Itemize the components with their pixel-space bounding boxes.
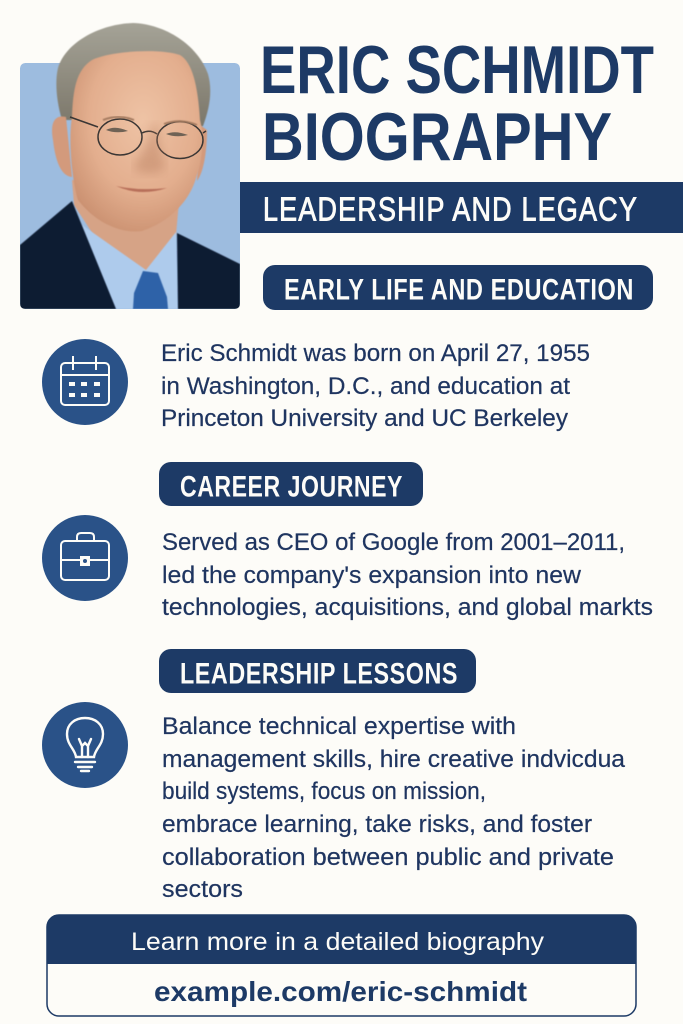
text block: early life: in Washington, D.C., and education at (161, 373, 570, 400)
text block: leadership lessons: embrace learning, take risks, and foster (162, 811, 592, 838)
text block: early life: Eric Schmidt was born on April 27, 1955 (161, 340, 590, 367)
portrait photo (20, 23, 240, 309)
title: BIOGRAPHY (262, 99, 612, 175)
eyes and brows (106, 128, 188, 136)
nose shadow (134, 125, 165, 173)
section heading: early life and education (263, 265, 653, 310)
glasses (70, 117, 206, 158)
text block: leadership lessons: collaboration between public and private (162, 844, 614, 871)
text block: leadership lessons: build systems, focus on mission, (162, 778, 486, 805)
text block: leadership lessons: management skills, hire creative indvicdua (162, 746, 626, 773)
icon: calendar (42, 339, 128, 425)
title (260, 32, 654, 175)
tie (133, 271, 168, 309)
text block: career (162, 529, 653, 621)
neck (72, 180, 180, 272)
section heading: leadership lessons: LEADERSHIP LESSONS (180, 658, 458, 690)
call to action box (47, 915, 636, 1016)
text block: early life (161, 340, 590, 432)
face (70, 51, 202, 231)
text block: leadership lessons (162, 713, 626, 903)
call to action box: Learn more in a detailed biography (131, 928, 545, 956)
icon: light bulb (42, 702, 128, 788)
section heading: career journey: CAREER JOURNEY (180, 470, 403, 504)
call to action box: example.com/eric-schmidt (154, 976, 527, 1007)
section heading: leadership lessons (159, 649, 476, 693)
subtitle banner (240, 182, 683, 233)
suit jacket (20, 201, 240, 309)
ears (52, 116, 207, 181)
mouth (116, 186, 167, 192)
hair (56, 23, 210, 130)
text block: career: led the company's expansion into new (162, 562, 582, 589)
section heading: career journey (159, 462, 423, 506)
text block: career: technologies, acquisitions, and global markts (162, 594, 653, 621)
text block: early life: Princeton University and UC Berkeley (161, 405, 568, 432)
text block: leadership lessons: Balance technical expertise with (162, 713, 516, 740)
icon: briefcase (42, 515, 128, 601)
text block: leadership lessons: sectors (162, 876, 243, 903)
shirt collar (82, 226, 178, 309)
text block: career: Served as CEO of Google from 2001–2011, (162, 529, 625, 556)
